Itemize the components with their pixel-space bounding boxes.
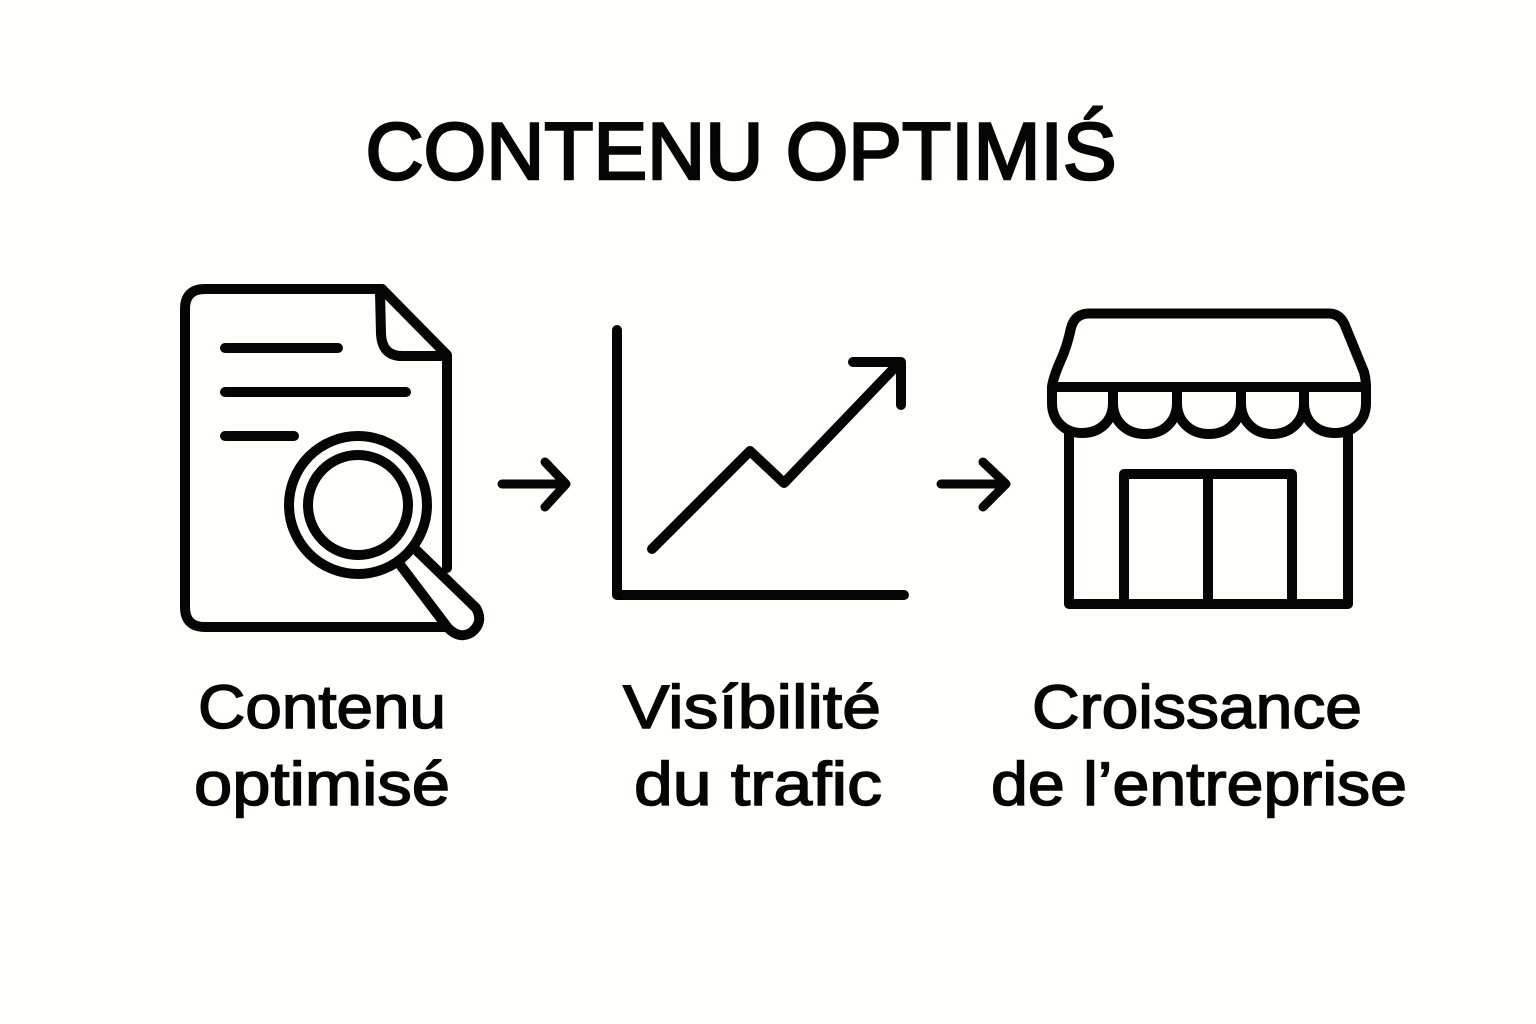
arrow: content to visibility xyxy=(502,462,566,507)
label: croissance de l'entreprise: de l’entreprise xyxy=(991,750,1407,818)
label: contenu optimisé: Contenu xyxy=(198,673,446,741)
label: visibilité du trafic xyxy=(623,673,882,818)
label: visibilité du trafic: Visíbilité xyxy=(623,673,881,741)
arrow: visibility to growth xyxy=(941,462,1006,507)
label: croissance de l'entreprise xyxy=(991,673,1407,818)
icon: rising line chart xyxy=(617,330,904,595)
label: contenu optimisé: optimisé xyxy=(194,750,450,818)
label: visibilité du trafic: du trafic xyxy=(634,750,882,818)
icon: document with magnifying glass xyxy=(185,289,479,635)
label: contenu optimisé xyxy=(194,673,450,818)
icon: storefront xyxy=(1052,313,1366,604)
title: CONTENU OPTIMIŚ xyxy=(366,106,1116,197)
label: croissance de l'entreprise: Croissance xyxy=(1032,673,1362,741)
